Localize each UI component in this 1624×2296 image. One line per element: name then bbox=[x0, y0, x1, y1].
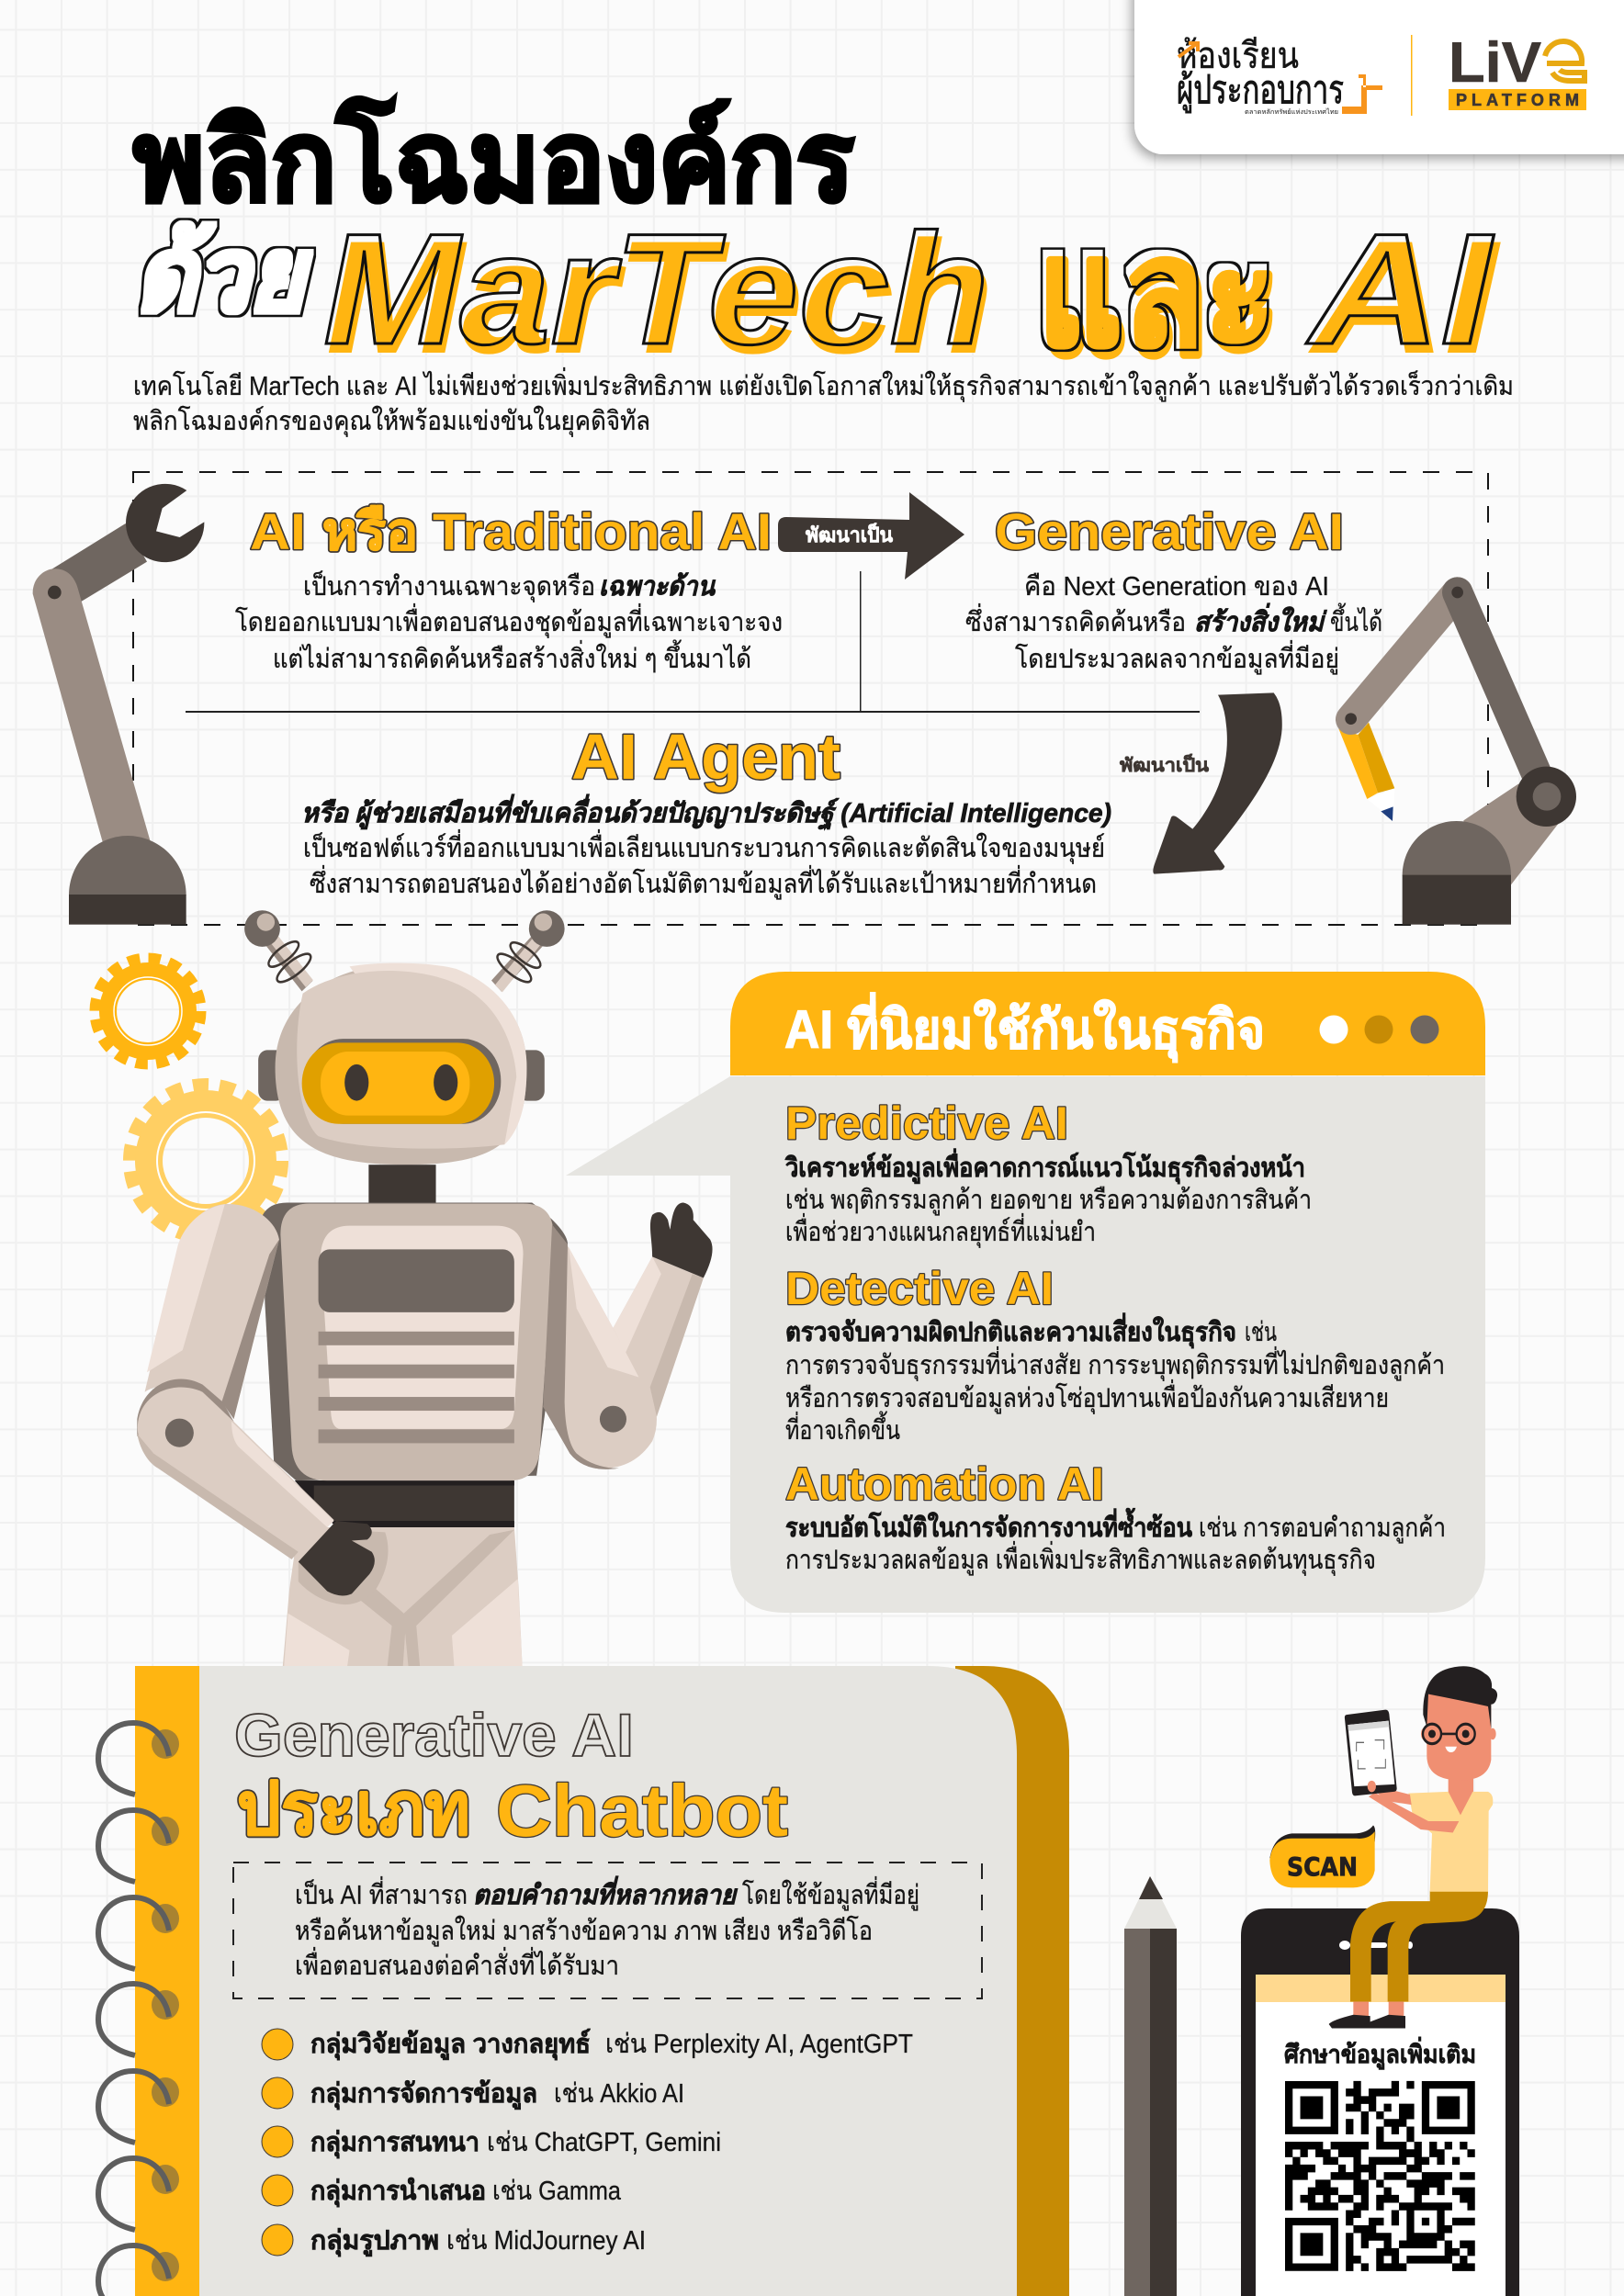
panel: AI evolution dashed box bbox=[133, 472, 1488, 925]
item: conversation bbox=[262, 2126, 721, 2158]
heading: Traditional AI: AI bbox=[250, 502, 306, 560]
Detective AI: หรือการตรวจสอบข้อมูลห่วงโซ่อุปทานเพื่อป้องกันความเสียหาย bbox=[785, 1379, 1389, 1414]
arrow: curved, evolves into bbox=[1120, 692, 1282, 874]
phone with QR code bbox=[1241, 1908, 1519, 2296]
icon: large light gear bbox=[130, 1085, 282, 1237]
heading: Generative AI: Generative AI bbox=[995, 502, 1344, 560]
text: generative AI description: ขึ้นได้ bbox=[1330, 602, 1382, 637]
heading: Traditional AI: หรือ bbox=[322, 502, 418, 560]
Detective AI bbox=[785, 1263, 1445, 1446]
notebook heading: ประเภท bbox=[237, 1768, 470, 1850]
arrow: evolves into: พัฒนาเป็น bbox=[806, 522, 893, 546]
logo: live platform: PLATFORM bbox=[1456, 91, 1579, 109]
title: outline layer: AI bbox=[1305, 201, 1494, 377]
item: data management: กลุ่มการจัดการข้อมูล bbox=[310, 2079, 537, 2110]
Automation AI: การประมวลผลข้อมูล เพื่อเพิ่มประสิทธิภาพและลดต้นทุนธุรกิจ bbox=[785, 1541, 1376, 1576]
arrow: evolves into bbox=[778, 492, 964, 580]
item: image bbox=[262, 2224, 646, 2257]
panel: AI used in business bbox=[566, 972, 1485, 1613]
Automation AI: ระบบอัตโนมัติในการจัดการงานที่ซ้ำซ้อน bbox=[785, 1507, 1192, 1543]
Automation AI bbox=[785, 1458, 1446, 1576]
Detective AI: Detective AI bbox=[785, 1263, 1054, 1314]
title: yellow layer: AI bbox=[1309, 209, 1500, 386]
title bbox=[133, 96, 1500, 386]
logo: classroom: ตลาดหลักทรัพย์แห่งประเทศไทย bbox=[1245, 107, 1338, 116]
item: presentation: กลุ่มการนำเสนอ bbox=[310, 2177, 486, 2207]
Predictive AI: Predictive AI bbox=[785, 1097, 1068, 1149]
title: outline layer: MarTech bbox=[323, 201, 989, 377]
Detective AI: การตรวจจับธุรกรรมที่น่าสงสัย การระบุพฤติกรรมที่ไม่ปกติของลูกค้า bbox=[785, 1346, 1445, 1381]
phone body bbox=[1241, 1908, 1519, 2296]
item: image: กลุ่มรูปภาพ bbox=[310, 2226, 439, 2257]
head bbox=[258, 963, 545, 1165]
notebook dashed callout: โดยใช้ข้อมูลที่มีอยู่ bbox=[742, 1876, 919, 1911]
notebook dashed callout bbox=[233, 1863, 982, 1998]
heading: Traditional AI: Traditional AI bbox=[433, 502, 772, 560]
title: yellow layer bbox=[327, 209, 1500, 386]
item: research: เช่น Perplexity AI, AgentGPT bbox=[605, 2030, 913, 2059]
item: image: เช่น MidJourney AI bbox=[446, 2226, 646, 2256]
body bbox=[263, 1202, 619, 1666]
Automation AI: Automation AI bbox=[785, 1458, 1104, 1510]
callout: scan bubble: SCAN bbox=[1287, 1851, 1358, 1882]
text: traditional AI description: โดยออกแบบมาเพื่อตอบสนองชุดข้อมูลที่เฉพาะเจาะจง bbox=[235, 603, 783, 638]
text: generative AI description bbox=[965, 572, 1382, 675]
illustration: right robot arm with pencil bbox=[1338, 587, 1576, 925]
text: traditional AI description: เฉพาะด้าน bbox=[599, 572, 716, 602]
text: generative AI description: โดยประมวลผลจากข้อมูลที่มีอยู่ bbox=[1015, 640, 1339, 675]
phone speaker bbox=[1339, 1941, 1413, 1950]
text: AI agent description: ซึ่งสามารถตอบสนองได้อย่างอัตโนมัติตามข้อมูลที่ได้รับและเป้าหมายที่กำหนด bbox=[310, 865, 1097, 900]
heading: Traditional AI bbox=[250, 502, 772, 560]
notebook heading: ประเภท bbox=[237, 1768, 470, 1850]
Automation AI: เช่น การตอบคำถามลูกค้า bbox=[1199, 1514, 1446, 1544]
item: research: กลุ่มวิจัยข้อมูล วางกลยุทธ์ bbox=[310, 2028, 591, 2060]
Predictive AI: เช่น พฤติกรรมลูกค้า ยอดขาย หรือความต้องการสินค้า bbox=[785, 1186, 1312, 1216]
notebook back page bbox=[955, 1666, 1069, 2296]
logo: classroom bbox=[1177, 36, 1382, 116]
Detective AI: ตรวจจับความผิดปกติและความเสี่ยงในธุรกิจ bbox=[785, 1312, 1236, 1348]
intro text: พลิกโฉมองค์กรของคุณให้พร้อมแข่งขันในยุคดิจิทัล bbox=[133, 405, 650, 437]
right arm bbox=[543, 1202, 713, 1469]
text: AI agent description: หรือ ผู้ช่วยเสมือนที่ขับเคลื่อนด้วยปัญญาประดิษฐ์ (Artificial Intelligence) bbox=[301, 793, 1111, 830]
illustration: left robot arm with wrench bbox=[33, 484, 204, 925]
panel heading: AI ที่นิยมใช้กันในธุรกิจ bbox=[784, 992, 1265, 1064]
heading: Traditional AI: หรือ bbox=[322, 502, 418, 560]
Detective AI: ที่อาจเกิดขึ้น bbox=[785, 1411, 900, 1446]
logo card bbox=[1134, 0, 1624, 154]
left arm bbox=[137, 1204, 375, 1595]
callout: scan bubble bbox=[1269, 1825, 1375, 1887]
title: outline layer: และ bbox=[1035, 201, 1274, 377]
title line 1: พลิกโฉมองค์กร bbox=[133, 96, 854, 224]
text: traditional AI description: แต่ไม่สามารถคิดค้นหรือสร้างสิ่งใหม่ ๆ ขึ้นมาได้ bbox=[273, 639, 751, 674]
speech bubble body bbox=[566, 1076, 1485, 1613]
logo: live platform bbox=[1449, 31, 1586, 110]
icon: small yellow gear bbox=[95, 958, 201, 1064]
title word: with: ด้วย bbox=[135, 218, 311, 332]
Predictive AI bbox=[784, 1097, 1312, 1248]
intro text bbox=[133, 367, 1514, 437]
QR code bbox=[1285, 2081, 1475, 2271]
item: conversation: เช่น ChatGPT, Gemini bbox=[487, 2128, 721, 2157]
notebook dashed callout: หรือค้นหาข้อมูลใหม่ มาสร้างข้อความ ภาพ เสียง หรือวิดีโอ bbox=[295, 1915, 873, 1947]
logo: classroom: ผู้ประกอบการ bbox=[1177, 68, 1344, 113]
phone screen bbox=[1256, 1975, 1506, 2296]
panel header bbox=[730, 972, 1485, 1075]
item: conversation: กลุ่มการสนทนา bbox=[310, 2128, 479, 2158]
logo: live platform: LiV bbox=[1449, 31, 1541, 95]
item: data management bbox=[262, 2077, 684, 2110]
illustration: man scanning with tablet bbox=[1329, 1666, 1497, 2028]
text: traditional AI description: เป็นการทำงานเฉพาะจุดหรือ bbox=[303, 569, 595, 602]
heading: AI Agent: AI Agent bbox=[571, 721, 840, 793]
notebook heading bbox=[237, 1768, 788, 1851]
text: AI agent description: เป็นซอฟต์แวร์ที่ออกแบบมาเพื่อเลียนแบบกระบวนการคิดและตัดสินใจของมนุษย์ bbox=[303, 829, 1105, 864]
chatbot list bbox=[262, 2028, 913, 2257]
text: AI agent description bbox=[301, 793, 1111, 900]
notebook dashed callout: ตอบคำถามที่หลากหลาย bbox=[473, 1875, 739, 1910]
title: yellow layer: MarTech bbox=[327, 209, 993, 386]
item: research bbox=[262, 2028, 913, 2060]
header dots bbox=[1319, 1016, 1438, 1043]
item: presentation bbox=[262, 2175, 622, 2207]
illustration: pencil bbox=[1124, 1876, 1177, 2296]
title: yellow layer: และ bbox=[1040, 209, 1279, 386]
notebook heading outline: Generative AI bbox=[234, 1701, 634, 1769]
title: outline layer bbox=[323, 201, 1494, 377]
Detective AI: เช่น bbox=[1245, 1318, 1277, 1347]
Predictive AI: เพื่อช่วยวางแผนกลยุทธ์ที่แม่นยำ bbox=[785, 1213, 1096, 1248]
arrow: curved, evolves into: พัฒนาเป็น bbox=[1120, 753, 1209, 776]
text: traditional AI description bbox=[235, 569, 783, 674]
item: data management: เช่น Akkio AI bbox=[554, 2079, 684, 2109]
notebook front page bbox=[135, 1666, 1017, 2296]
text: generative AI description: สร้างสิ่งใหม่ bbox=[1194, 602, 1327, 637]
logo: classroom: ห้องเรียน bbox=[1177, 36, 1299, 76]
notebook yellow strip bbox=[135, 1666, 199, 2296]
notebook dashed callout: เพื่อตอบสนองต่อคำสั่งที่ได้รับมา bbox=[295, 1947, 619, 1981]
panel: notebook Generative AI chatbot bbox=[98, 1666, 1069, 2296]
Predictive AI: วิเคราะห์ข้อมูลเพื่อคาดการณ์แนวโน้มธุรกิจล่วงหน้า bbox=[784, 1148, 1305, 1184]
QR heading: ศึกษาข้อมูลเพิ่มเติม bbox=[1284, 2036, 1476, 2070]
illustration: robot bbox=[137, 910, 713, 1666]
antennas bbox=[244, 910, 565, 988]
notebook rings bbox=[98, 1723, 179, 2296]
text: generative AI description: คือ Next Generation ของ AI bbox=[1024, 572, 1329, 602]
notebook dashed callout: เป็น AI ที่สามารถ bbox=[295, 1876, 468, 1910]
text: generative AI description: ซึ่งสามารถคิดค้นหรือ bbox=[965, 603, 1186, 637]
title word: with: ด้วย bbox=[135, 218, 311, 332]
notebook heading: Chatbot bbox=[496, 1770, 788, 1851]
item: presentation: เช่น Gamma bbox=[492, 2177, 622, 2206]
